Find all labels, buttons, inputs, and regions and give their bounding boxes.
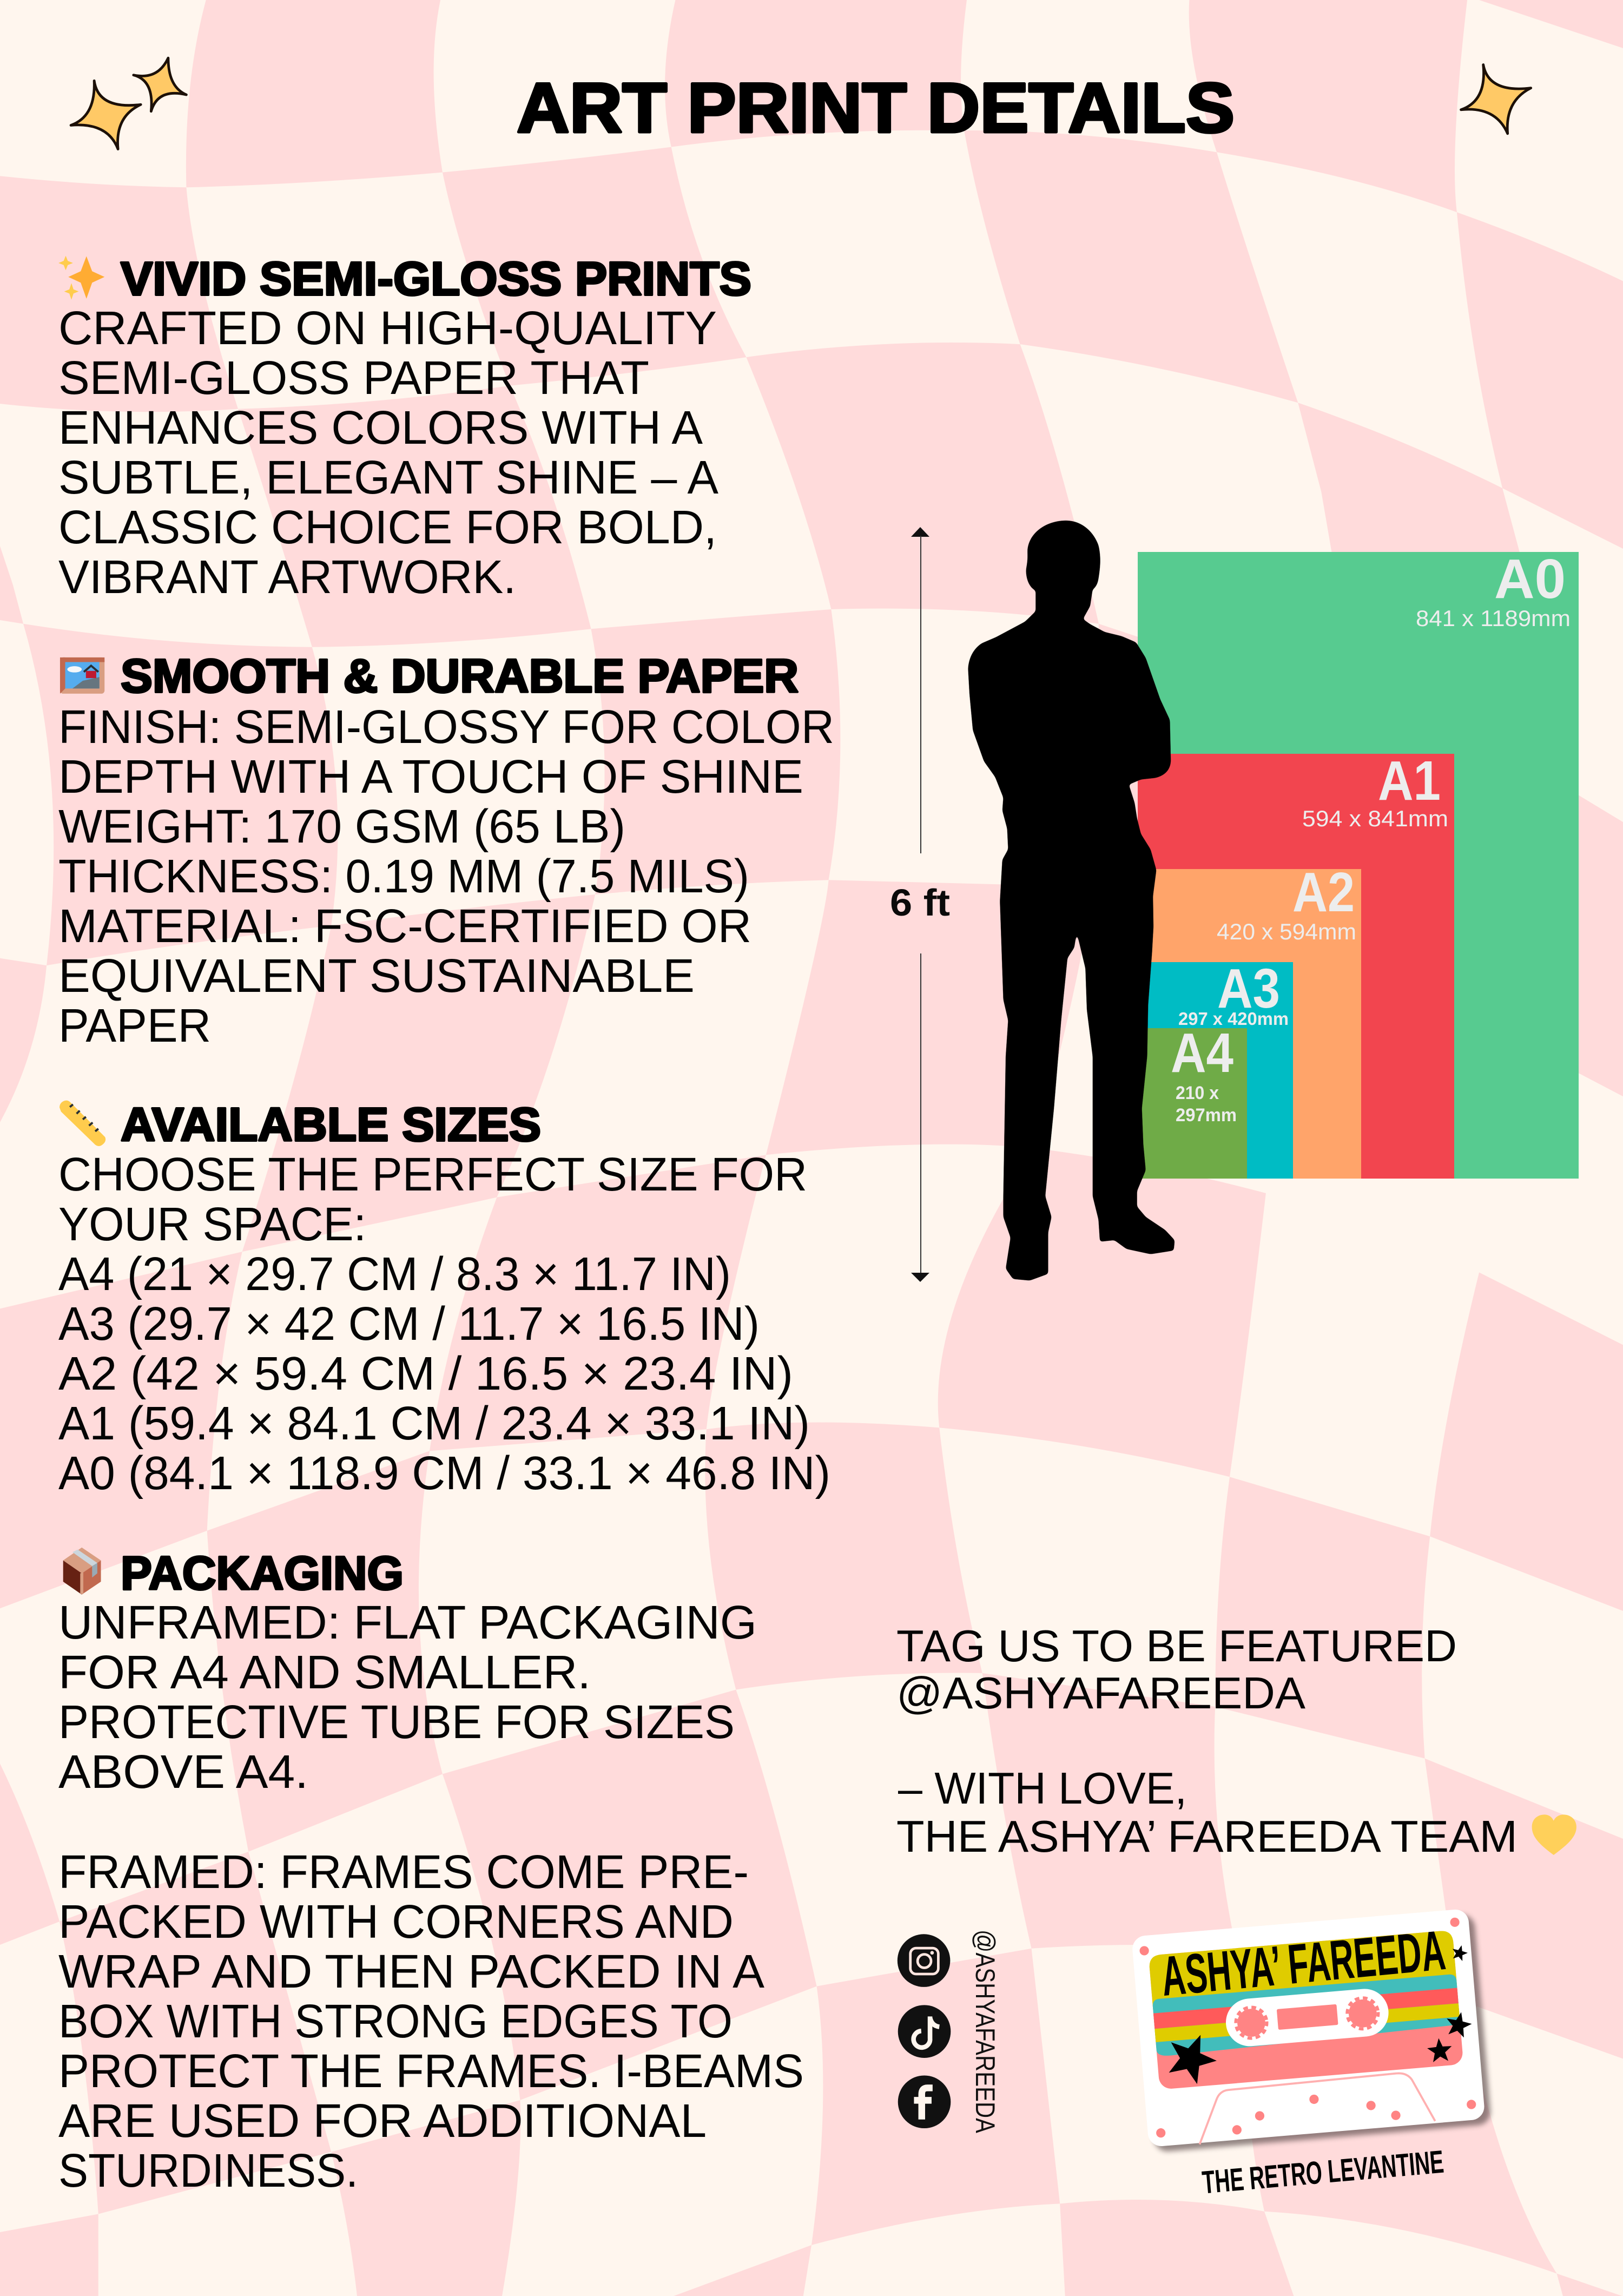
body text: framed packaging: ARE USED FOR ADDITIONAL — [58, 2095, 707, 2147]
tagline: THE RETRO LEVANTINE — [1200, 2143, 1445, 2201]
logo: cassette tape — [1131, 1909, 1492, 2201]
cassette screw dots — [1140, 1918, 1476, 2137]
cassette shadow — [1138, 1913, 1492, 2153]
panel: A1 size: 594 x 841mm — [1302, 806, 1448, 831]
body text: size list: CHOOSE THE PERFECT SIZE FOR — [58, 1148, 807, 1201]
social handle vertical text: @ASHYAFAREEDA — [970, 1930, 1000, 2134]
cassette lower trapezoid — [1199, 2073, 1435, 2144]
body text: framed packaging: FRAMED: FRAMES COME PRE- — [58, 1846, 749, 1898]
heading: smooth and durable paper: SMOOTH & DURABLE PAPER — [121, 650, 799, 702]
title: ART PRINT DETAILS — [517, 68, 1235, 147]
body text: unframed packaging — [58, 1596, 757, 1798]
section: available sizes — [58, 1098, 830, 1499]
text block: tag us — [896, 1621, 1518, 1861]
body text: size list: A1 (59.4 × 84.1 CM / 23.4 × 33.1 IN) — [58, 1397, 810, 1450]
body text: size list: A4 (21 × 29.7 CM / 8.3 × 11.7 IN) — [58, 1248, 731, 1300]
icon: yellow heart — [1532, 1814, 1576, 1855]
cassette stars — [1160, 1943, 1474, 2088]
body text: unframed packaging: FOR A4 AND SMALLER. — [58, 1646, 591, 1699]
arrow: six foot height marker — [911, 527, 929, 1282]
panel: A3 size — [1138, 957, 1293, 1179]
icon: tiktok — [898, 2005, 951, 2058]
body text: size list: A2 (42 × 59.4 CM / 16.5 × 23.4 IN) — [58, 1347, 793, 1400]
body text: vivid semi-gloss prints: CLASSIC CHOICE FOR BOLD, — [58, 501, 717, 554]
body text: framed packaging: STURDINESS. — [58, 2144, 358, 2197]
body text: paper specifications: DEPTH WITH A TOUCH OF SHINE — [58, 751, 803, 803]
body text: unframed packaging: PROTECTIVE TUBE FOR SIZES — [58, 1696, 735, 1748]
body text: framed packaging: BOX WITH STRONG EDGES TO — [58, 1995, 733, 2048]
panel: A0 size — [1138, 548, 1579, 1179]
icon: instagram — [898, 1934, 950, 1987]
social icons — [898, 1934, 951, 2128]
body text: framed packaging: PACKED WITH CORNERS AND — [58, 1896, 734, 1948]
icon: framed picture emoji — [60, 657, 104, 694]
icon: ruler emoji — [60, 1101, 105, 1146]
body text: unframed packaging: UNFRAMED: FLAT PACKAGING — [58, 1596, 757, 1649]
body text: unframed packaging: ABOVE A4. — [58, 1746, 308, 1798]
body text: vivid semi-gloss prints: SEMI-GLOSS PAPER THAT — [58, 352, 649, 404]
section: packaging — [58, 1547, 804, 2197]
icon: package box emoji — [63, 1548, 101, 1595]
body text: paper specifications: PAPER — [58, 999, 211, 1052]
panel: A0 size: 841 x 1189mm — [1416, 606, 1571, 631]
panel: A1 size: A1 — [1378, 749, 1441, 812]
heading: available sizes: AVAILABLE SIZES — [121, 1098, 541, 1151]
body text: vivid semi-gloss prints — [58, 302, 718, 603]
panel: A4 size: 297mm — [1176, 1105, 1237, 1126]
body text: size list: A0 (84.1 × 118.9 CM / 33.1 × 46.8 IN) — [58, 1447, 830, 1499]
text block: tag us: THE ASHYA’ FAREEDA TEAM — [896, 1811, 1518, 1861]
heading: vivid semi-gloss prints: VIVID SEMI-GLOSS PRINTS — [121, 253, 751, 305]
section: vivid semi-gloss prints — [58, 253, 751, 603]
icon: facebook — [898, 2075, 951, 2128]
body text: vivid semi-gloss prints: SUBTLE, ELEGANT SHINE – A — [58, 451, 718, 504]
heading: packaging: PACKAGING — [121, 1547, 404, 1600]
body text: paper specifications: FINISH: SEMI-GLOSSY FOR COLOR — [58, 701, 834, 753]
body text: framed packaging — [58, 1846, 804, 2197]
man silhouette — [968, 521, 1175, 1281]
body text: paper specifications: WEIGHT: 170 GSM (65 LB) — [58, 800, 625, 853]
body text: size list — [58, 1148, 830, 1499]
body text: paper specifications: THICKNESS: 0.19 MM (7.5 MILS) — [58, 850, 749, 903]
icon: sparkles emoji — [58, 256, 104, 300]
section: smooth and durable paper — [58, 650, 834, 1052]
body text: vivid semi-gloss prints: ENHANCES COLORS WITH A — [58, 402, 703, 454]
cassette body — [1131, 1909, 1485, 2147]
body text: paper specifications — [58, 701, 834, 1052]
icon: two sparkle stars top left — [71, 58, 186, 149]
panel: A2 size — [1138, 861, 1361, 1179]
body text: size list: A3 (29.7 × 42 CM / 11.7 × 16.5 IN) — [58, 1298, 760, 1350]
panel: A3 size: A3 — [1217, 957, 1280, 1019]
panel: A4 size: A4 — [1171, 1022, 1233, 1084]
text block: tag us: TAG US TO BE FEATURED — [896, 1621, 1457, 1671]
body text: vivid semi-gloss prints: CRAFTED ON HIGH-QUALITY — [58, 302, 717, 354]
body text: paper specifications: EQUIVALENT SUSTAINABLE — [58, 950, 695, 1002]
text block: tag us: @ASHYAFAREEDA — [896, 1668, 1306, 1718]
panel: A3 size: 297 x 420mm — [1178, 1009, 1289, 1029]
panel: A0 size: A0 — [1494, 548, 1566, 610]
panel: A4 size — [1138, 1022, 1247, 1179]
body text: size list: YOUR SPACE: — [58, 1198, 366, 1251]
label: 6 ft: 6 ft — [890, 881, 950, 924]
body text: vivid semi-gloss prints: VIBRANT ARTWORK. — [58, 551, 516, 603]
cassette window — [1224, 1987, 1390, 2048]
body text: framed packaging: PROTECT THE FRAMES. I-BEAMS — [58, 2045, 804, 2097]
chart: paper size comparison — [890, 521, 1579, 1282]
icon: sparkle star top right — [1461, 65, 1531, 134]
panel: A1 size — [1138, 749, 1454, 1179]
body text: paper specifications: MATERIAL: FSC-CERTIFIED OR — [58, 900, 751, 952]
panel: A2 size: A2 — [1292, 861, 1355, 923]
body text: framed packaging: WRAP AND THEN PACKED IN A — [58, 1945, 764, 1998]
panel: A4 size: 210 x — [1176, 1083, 1219, 1103]
text block: tag us: – WITH LOVE, — [898, 1763, 1187, 1813]
panel: A2 size: 420 x 594mm — [1217, 919, 1356, 944]
